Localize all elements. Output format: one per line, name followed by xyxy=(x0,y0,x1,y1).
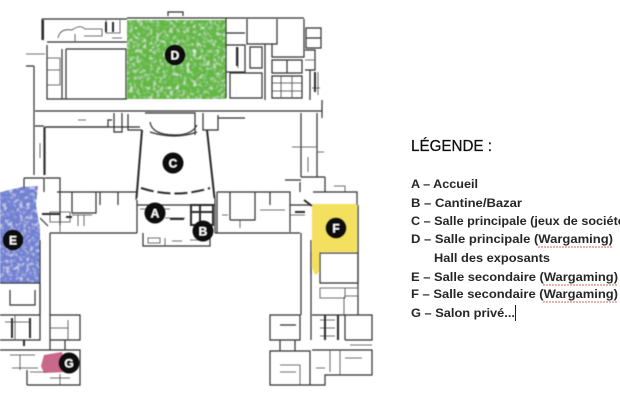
map marker E: E xyxy=(9,234,17,248)
legend item D: D – Salle principale (Wargaming) xyxy=(411,232,613,246)
map marker A: A xyxy=(151,206,160,220)
lower right wing walls xyxy=(270,315,372,385)
map marker C xyxy=(162,152,184,174)
map marker G: G xyxy=(64,356,74,370)
map marker A xyxy=(144,202,166,224)
top left wing walls xyxy=(26,19,127,99)
legend title: LÉGENDE : xyxy=(411,136,492,155)
right middle wing walls xyxy=(215,177,358,340)
text cursor xyxy=(514,305,516,321)
map marker F: F xyxy=(332,222,340,236)
top centre and right wing walls xyxy=(127,12,321,100)
legend item D second line: Hall des exposants xyxy=(434,251,550,265)
legend item B: B – Cantine/Bazar xyxy=(411,196,522,210)
entrance block walls xyxy=(137,200,215,246)
left middle wing walls xyxy=(24,127,140,315)
room G: pink private lounge xyxy=(41,352,66,373)
legend item E: E – Salle secondaire (Wargaming) xyxy=(411,270,618,284)
map marker E xyxy=(2,230,24,250)
main corridor walls xyxy=(26,66,324,177)
map marker D xyxy=(164,44,186,66)
spellcheck underlines xyxy=(538,247,617,302)
lower left wing walls xyxy=(0,283,80,385)
legend item C: C – Salle principale (jeux de société) xyxy=(411,214,620,228)
room E: blue secondary hall xyxy=(0,186,40,283)
legend item F: F – Salle secondaire (Wargaming) xyxy=(411,287,618,301)
map marker B xyxy=(192,220,214,242)
map marker G xyxy=(58,352,80,374)
map marker F xyxy=(326,218,346,238)
map marker C: C xyxy=(169,156,178,170)
hall C walls xyxy=(136,130,215,200)
room D: green exhibitors hall xyxy=(127,20,226,99)
map marker B: B xyxy=(199,224,208,238)
floor plan xyxy=(0,12,372,385)
room F: yellow secondary hall xyxy=(312,204,357,275)
room below F xyxy=(311,207,358,315)
map marker D: D xyxy=(171,48,180,62)
legend item A: A – Accueil xyxy=(411,177,478,191)
legend xyxy=(411,136,620,321)
legend item G: G – Salon privé... xyxy=(411,306,515,320)
